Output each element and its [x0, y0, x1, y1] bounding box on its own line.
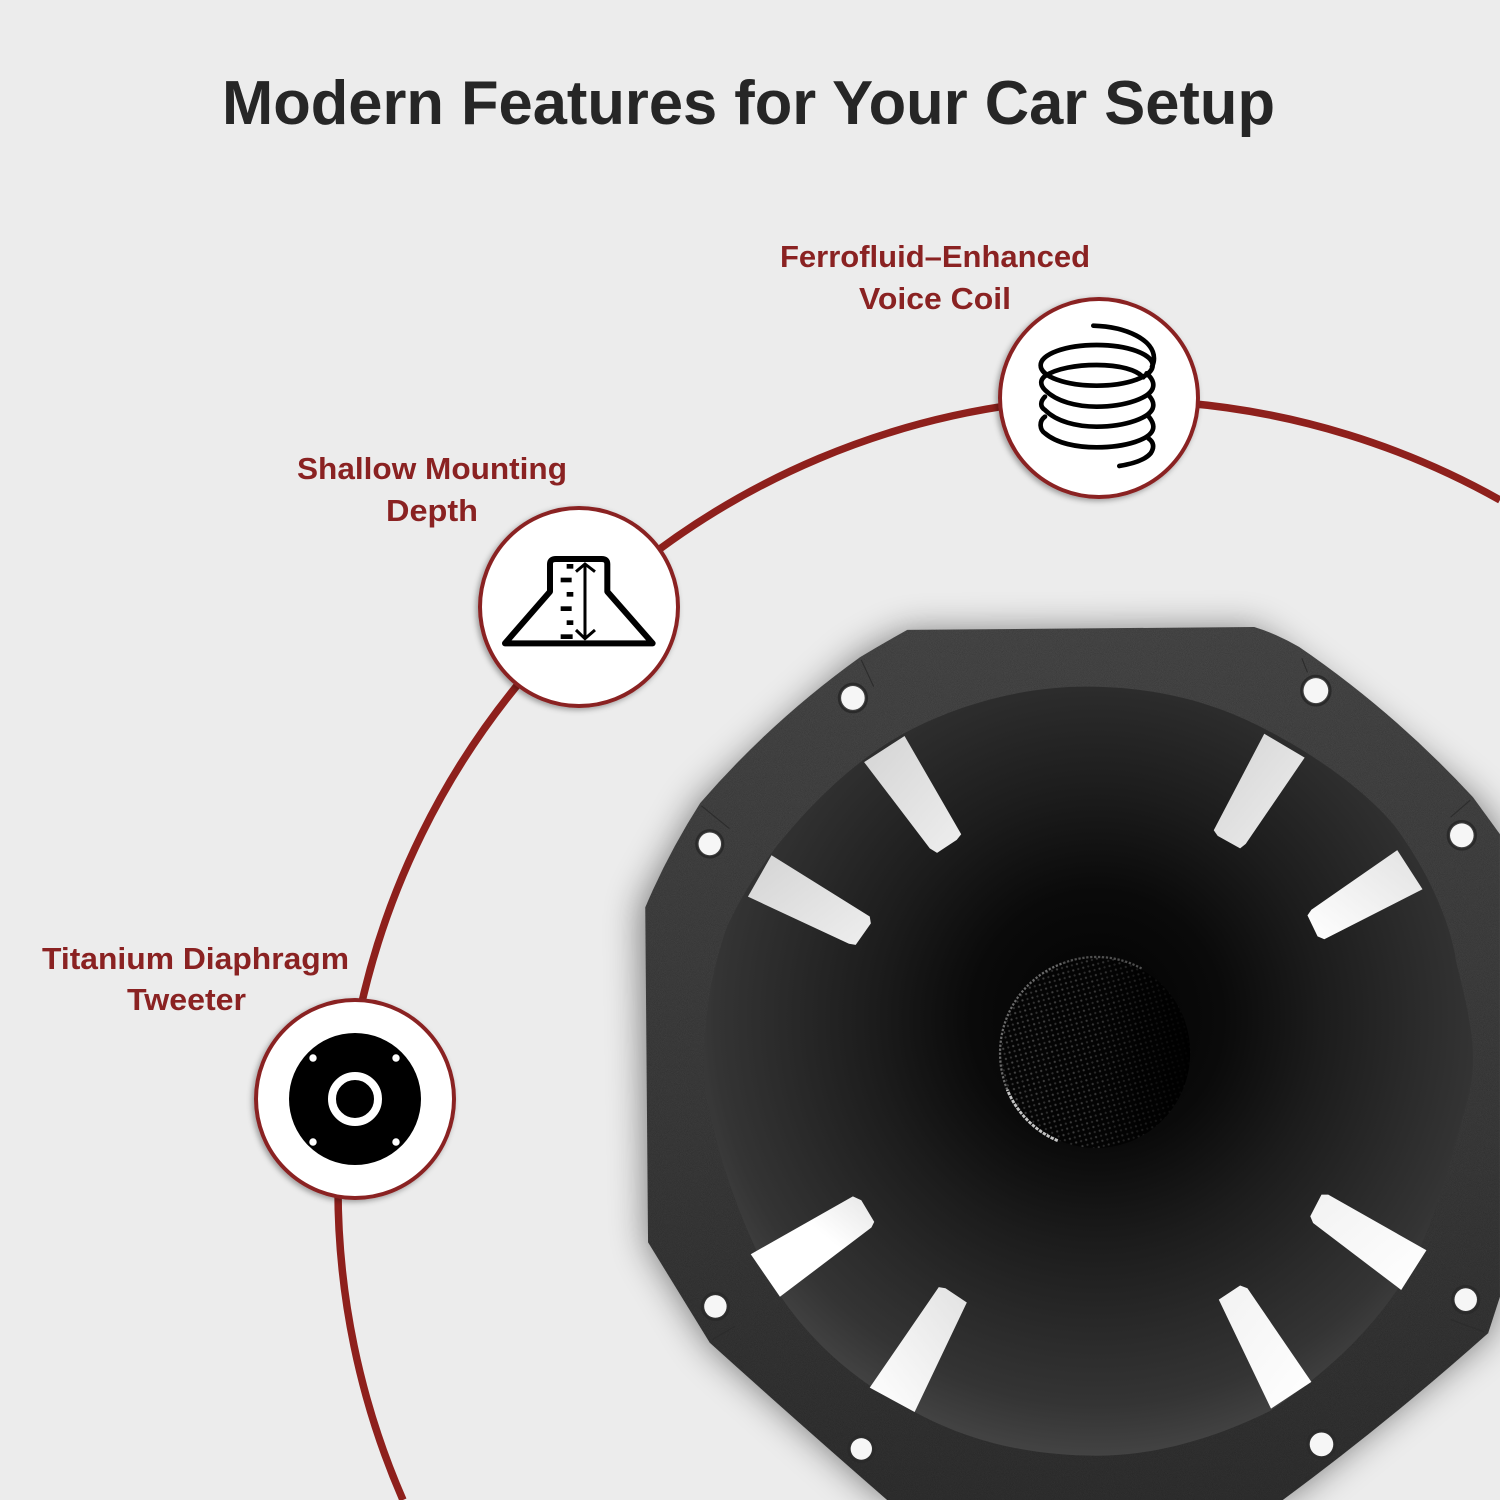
cone slots	[748, 734, 1426, 1412]
label: ferrofluid voice coil	[780, 239, 1090, 316]
icon: coil spring	[1041, 326, 1154, 466]
icon circle: coil	[1000, 299, 1198, 497]
label: ferrofluid voice coil: Ferrofluid–Enhanced	[780, 239, 1090, 274]
speaker photo	[620, 610, 1500, 1500]
feature: shallow mounting depth	[297, 451, 678, 706]
label: shallow mounting depth	[297, 451, 567, 528]
red connecting arc	[338, 403, 1500, 1500]
label: titanium diaphragm tweeter	[42, 941, 349, 1017]
icon circle: depth	[480, 508, 678, 706]
feature: titanium diaphragm tweeter	[42, 941, 454, 1198]
label: titanium diaphragm tweeter: Titanium Diaphragm	[42, 941, 349, 976]
icon: mounting depth	[505, 559, 653, 643]
icon circle: tweeter	[256, 1000, 454, 1198]
mounting holes	[696, 658, 1484, 1462]
label: shallow mounting depth: Shallow Mounting	[297, 451, 567, 486]
label: shallow mounting depth: Depth	[386, 493, 478, 528]
label: ferrofluid voice coil: Voice Coil	[859, 281, 1011, 316]
title: Modern Features for Your Car Setup	[222, 69, 1275, 138]
center dome tweeter	[1000, 957, 1190, 1148]
feature: ferrofluid voice coil	[780, 239, 1198, 497]
label: titanium diaphragm tweeter: Tweeter	[127, 982, 246, 1017]
speaker flange	[645, 627, 1500, 1500]
speaker soft shadow	[641, 630, 1500, 1500]
flange texture	[620, 610, 1500, 1500]
icon: tweeter	[289, 1033, 421, 1165]
speaker cone	[704, 687, 1473, 1456]
